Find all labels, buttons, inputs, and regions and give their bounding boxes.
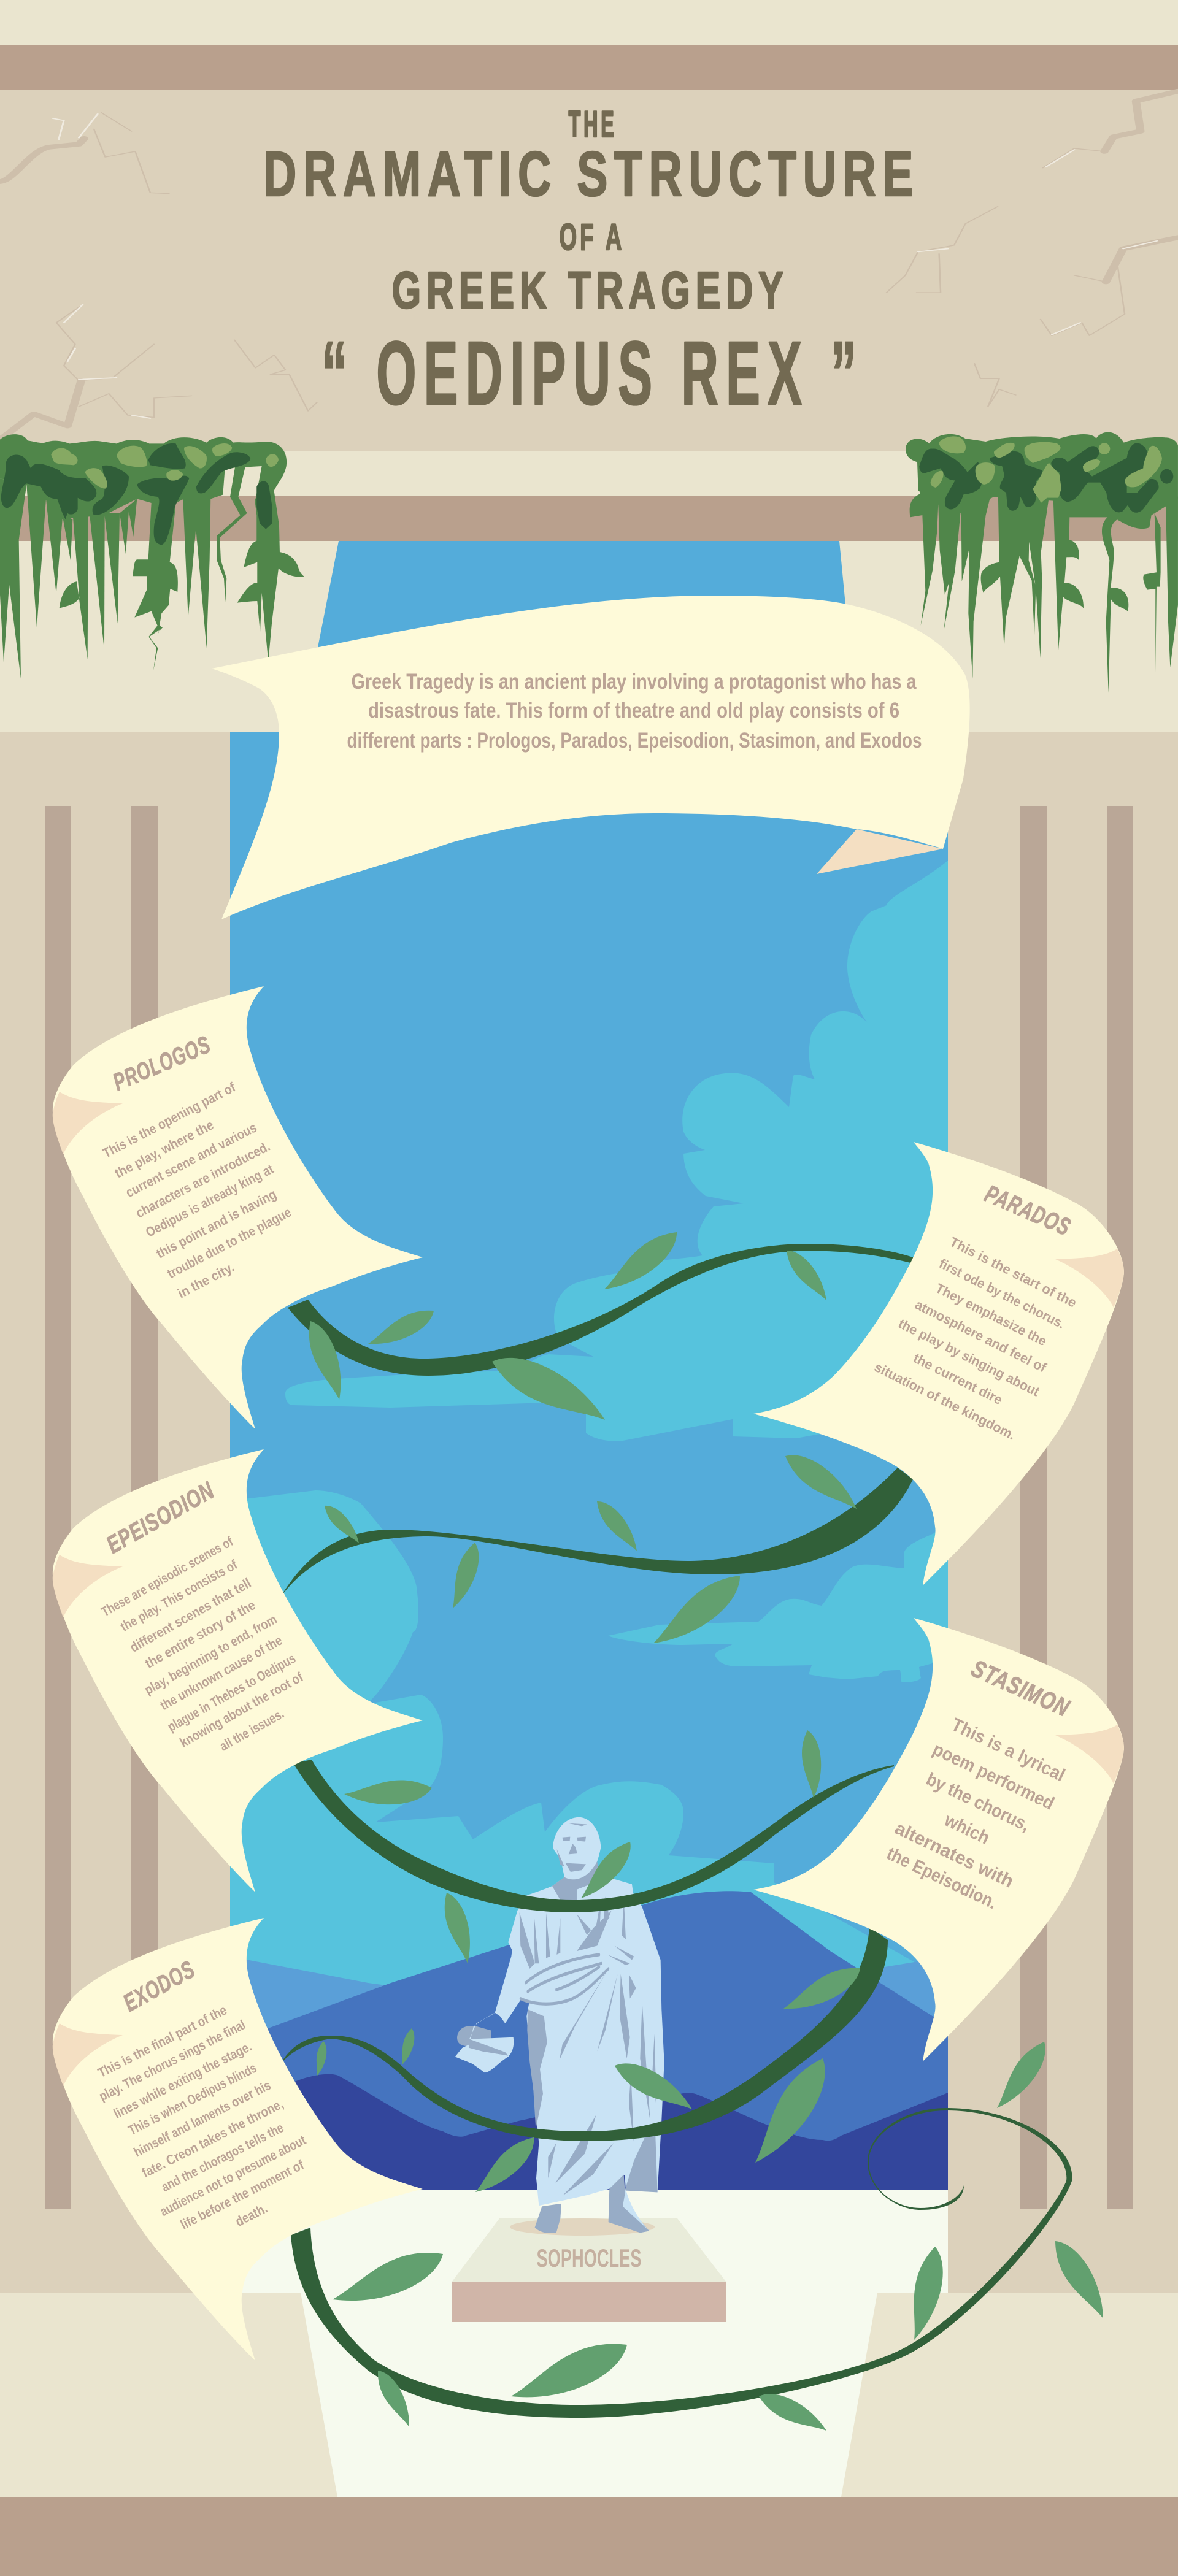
text: Epeisodion: plague in Thebes to Oedipus (165, 1650, 298, 1735)
statue of Sophocles (455, 1817, 664, 2233)
text: Epeisodion: the unknown cause of the (158, 1633, 285, 1713)
pedestal label: SOPHOCLES (536, 2244, 642, 2272)
leaves (301, 1224, 1115, 2439)
text: Exodos: fate. Creon takes the throne, (139, 2096, 286, 2180)
intro text: disastrous fate. This form of theatre and old play consists of 6 (368, 699, 899, 723)
text: Exodos: and the choragos tells the (159, 2120, 286, 2195)
heading: Parados: PARADOS (981, 1180, 1075, 1241)
intro banner (212, 596, 970, 919)
title: GREEK TRAGEDY (391, 261, 789, 319)
panel: Exodos (53, 1918, 423, 2361)
text: Exodos: This is the final part of the (96, 2003, 229, 2080)
mountains (230, 1891, 948, 2191)
intro text: different parts : Prologos, Parados, Epeisodion, Stasimon, and Exodos (347, 729, 922, 753)
text: Parados: the current dire (911, 1350, 1005, 1408)
hanging ivy: left (0, 434, 305, 679)
panel: Epeisodion (53, 1449, 423, 1892)
text: Prologos: trouble due to the plague (164, 1205, 294, 1281)
panel: Prologos (53, 986, 423, 1429)
pedestal (452, 2218, 726, 2322)
text: Exodos: play. The chorus sings the final (96, 2017, 248, 2104)
title: OF A (560, 217, 625, 258)
text: Stasimon (884, 1714, 1068, 1913)
text: Stasimon: the Epeisodion. (884, 1844, 1000, 1913)
text: Exodos: audience not to presume about (158, 2132, 309, 2219)
wall cracks (0, 91, 1178, 440)
heading: Stasimon: STASIMON (968, 1655, 1074, 1722)
floor (230, 2190, 948, 2497)
title: DRAMATIC STRUCTURE (263, 139, 920, 209)
text: Epeisodion: different scenes that tell (127, 1575, 253, 1655)
title: THE (568, 104, 617, 145)
text: Prologos: characters are introduced. (133, 1138, 272, 1221)
text: Prologos: this point and is having (154, 1186, 279, 1262)
text: Exodos: lines while exiting the stage. (111, 2039, 254, 2122)
text: Prologos: Oedipus is already king at (143, 1161, 276, 1240)
panel: Stasimon (753, 1618, 1124, 2061)
vines (280, 1244, 1072, 2418)
text: Parados: atmosphere and feel of (912, 1297, 1049, 1376)
text: Prologos: current scene and various (123, 1120, 259, 1200)
text: Exodos: himself and laments over his (131, 2077, 273, 2160)
text: Exodos (96, 2003, 309, 2233)
text: Stasimon: This is a lyrical (948, 1714, 1068, 1786)
text: Epeisodion: all the issues. (217, 1706, 287, 1754)
text: Epeisodion: These are episodic scenes of (99, 1533, 236, 1620)
text: Prologos: This is the opening part of (100, 1079, 238, 1161)
text: Stasimon: alternates with (891, 1818, 1017, 1892)
clouds (230, 861, 948, 2024)
text: Exodos: death. (233, 2201, 270, 2229)
heading: Exodos: EXODOS (119, 1956, 199, 2017)
text: Epeisodion: play, beginning to end, from (142, 1611, 279, 1698)
text: Epeisodion (99, 1533, 306, 1754)
intro text: Greek Tragedy is an ancient play involving a protagonist who has a (351, 670, 917, 694)
text: Epeisodion: the entire story of the (142, 1597, 258, 1671)
hanging ivy: right (906, 432, 1178, 693)
title (263, 104, 920, 424)
text: Prologos: the play, where the (112, 1117, 216, 1181)
text: Exodos: life before the moment of (178, 2157, 307, 2233)
text: Parados: situation of the kingdom. (872, 1359, 1018, 1443)
text: Stasimon: which (941, 1810, 993, 1849)
text: Parados: the play by singing about (896, 1316, 1042, 1400)
text: Prologos: in the city. (175, 1259, 237, 1301)
heading: Epeisodion: EPEISODION (102, 1477, 219, 1559)
panel: Parados (753, 1142, 1124, 1585)
text: Stasimon: by the chorus, (923, 1769, 1033, 1836)
intro text (347, 670, 922, 753)
text: Parados (872, 1234, 1079, 1443)
text: Prologos (100, 1079, 294, 1301)
text: Epeisodion: knowing about the root of (177, 1669, 306, 1750)
text: Parados: They emphasize the (933, 1280, 1049, 1349)
text: Exodos: This is when Oedipus blinds (126, 2060, 259, 2138)
text: Epeisodion: the play. This consists of (118, 1557, 240, 1635)
heading: Prologos: PROLOGOS (109, 1031, 215, 1096)
window: sky (230, 541, 948, 2191)
text: Parados: first ode by the chorus. (937, 1255, 1068, 1332)
text: Stasimon: poem performed (930, 1739, 1057, 1814)
text: Parados: This is the start of the (947, 1234, 1079, 1311)
